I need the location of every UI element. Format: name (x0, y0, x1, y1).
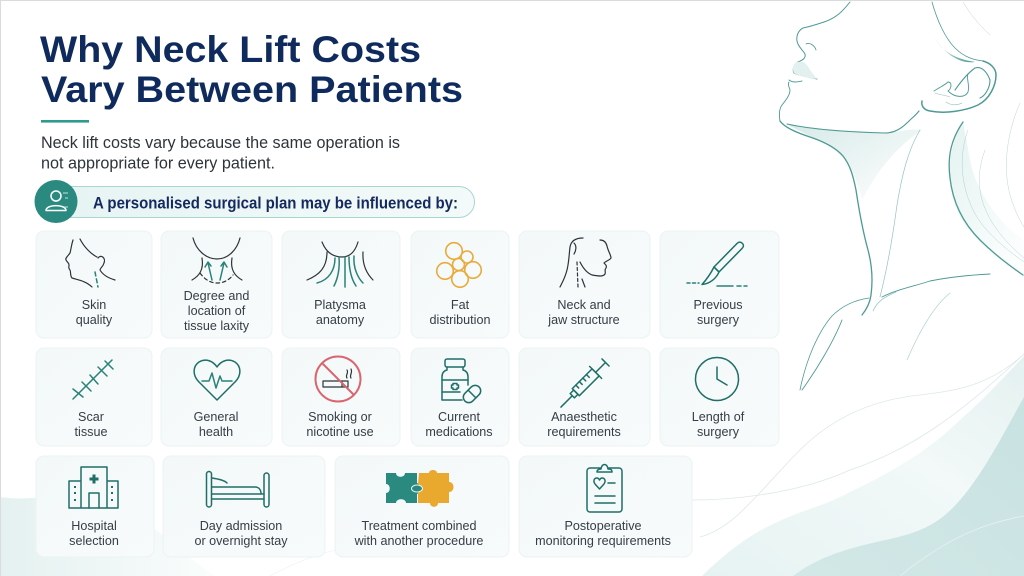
icon: syringe (555, 356, 612, 413)
label: Day admission (200, 519, 282, 533)
label: surgery (697, 313, 740, 327)
label: Hospital (71, 519, 117, 533)
label: Degree and (184, 289, 249, 303)
title: Why Neck Lift Costs (40, 29, 421, 70)
icon: scalpel (687, 242, 747, 286)
label: location of (188, 304, 246, 318)
card: skin quality (36, 231, 152, 338)
label: jaw structure (547, 313, 620, 327)
label: with another procedure (354, 534, 483, 548)
label: Length of (692, 410, 745, 424)
label: General (194, 410, 238, 424)
label: tissue laxity (184, 319, 250, 333)
label: requirements (547, 425, 621, 439)
card: hospital selection (36, 456, 154, 557)
collar bones (882, 274, 990, 297)
intro text: Neck lift costs vary because the same operation is (41, 134, 400, 152)
card: current medications (411, 348, 509, 446)
card: postoperative monitoring (519, 456, 692, 557)
subheading text: A personalised surgical plan may be influenced by: (93, 194, 458, 212)
label: Neck and (557, 298, 611, 312)
label: surgery (697, 425, 740, 439)
ear (922, 61, 996, 112)
icon: platysma muscle (307, 242, 373, 287)
label: Scar (78, 410, 104, 424)
label: nicotine use (306, 425, 374, 439)
card: general health (161, 348, 272, 446)
label: Previous (694, 298, 742, 312)
label: monitoring requirements (535, 534, 671, 548)
icon: no smoking (316, 356, 360, 402)
card: length of surgery (660, 348, 779, 446)
icon: person badge (34, 180, 78, 223)
card: treatment combined (335, 456, 509, 557)
card: neck and jaw structure (519, 231, 650, 338)
icon: clipboard (587, 464, 622, 512)
label: Treatment combined (361, 519, 477, 533)
hair strands (932, 2, 983, 61)
icon: sutured scar (73, 360, 113, 399)
nostril (806, 43, 816, 50)
card: previous surgery (660, 231, 779, 338)
label: anatomy (316, 313, 365, 327)
icon: neck with arrows (192, 238, 242, 283)
icon: face profile (66, 239, 115, 287)
icon: medicine bottle and pill (442, 359, 483, 405)
card: scar tissue (36, 348, 152, 446)
lips (793, 62, 817, 79)
label: Postoperative (564, 519, 642, 533)
front of neck (780, 121, 872, 315)
icon: heart with pulse (194, 360, 240, 400)
inner neck line (880, 130, 920, 297)
background waves (0, 354, 1024, 576)
label: quality (76, 313, 113, 327)
icon: bed (206, 472, 269, 507)
label: Anaesthetic (551, 410, 617, 424)
label: selection (69, 534, 119, 548)
intro text: not appropriate for every patient. (41, 154, 275, 172)
label: distribution (430, 313, 490, 327)
neck shading (787, 124, 922, 200)
label: health (199, 425, 233, 439)
icon: head with jaw line (560, 238, 611, 287)
card: day admission or overnight stay (163, 456, 325, 557)
icon: hospital (69, 467, 118, 508)
neck illustration (779, 2, 1024, 390)
icon: puzzle pieces (386, 470, 454, 507)
title: Vary Between Patients (41, 69, 463, 110)
icon: fat cells (437, 243, 481, 287)
subheading pill (34, 180, 474, 223)
label: tissue (75, 425, 107, 439)
card: fat distribution (411, 231, 509, 338)
card: anaesthetic requirements (519, 348, 650, 446)
card: smoking (282, 348, 400, 446)
card: tissue laxity (161, 231, 272, 338)
label: medications (425, 425, 493, 439)
label: Skin (82, 298, 106, 312)
label: Fat (451, 298, 470, 312)
face profile (793, 2, 850, 79)
card: platysma anatomy (282, 231, 400, 338)
label: Smoking or (308, 410, 372, 424)
title (40, 29, 463, 110)
hair shading (950, 122, 1024, 277)
label: Platysma (314, 298, 366, 312)
icon: clock (696, 358, 738, 400)
label: Current (438, 410, 480, 424)
label: or overnight stay (194, 534, 288, 548)
jaw line (787, 111, 919, 133)
back of neck hair line (949, 122, 1023, 275)
title accent rule (41, 120, 89, 123)
